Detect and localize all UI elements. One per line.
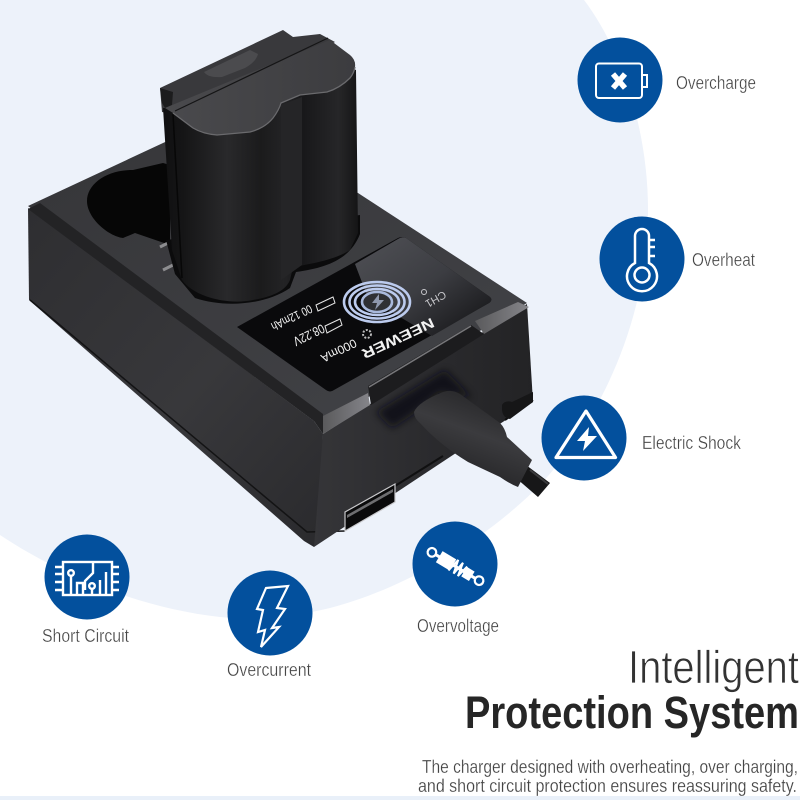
front edge dark slot <box>368 325 484 405</box>
cable wire highlight <box>530 470 548 484</box>
battery top cap <box>165 40 355 135</box>
label: Overheat <box>692 250 755 270</box>
badge <box>600 216 684 302</box>
front edge light corner left <box>323 393 370 434</box>
battery back side <box>160 88 173 108</box>
cable shadow on charger <box>376 370 472 428</box>
battery body <box>163 60 358 302</box>
label: Overcharge <box>676 73 756 93</box>
icon: lightning bolt <box>257 586 288 647</box>
icon: thermometer <box>627 229 657 291</box>
charger base seam <box>30 300 345 532</box>
icon: bolt <box>577 427 597 451</box>
battery back block <box>160 30 335 120</box>
feature: overvoltage <box>412 522 499 636</box>
battery cap rim <box>173 67 355 135</box>
front edge slot highlight <box>369 326 471 387</box>
label: Overcurrent <box>227 660 311 680</box>
bottom pale strip <box>0 796 800 800</box>
cable wire <box>516 465 550 497</box>
badge <box>542 396 626 480</box>
label: Electric Shock <box>642 433 742 453</box>
badge <box>44 534 130 620</box>
background: pale blue curved shape <box>0 0 648 618</box>
battery back latch <box>204 50 258 77</box>
screen icons <box>316 297 342 333</box>
battery side edge <box>173 114 182 278</box>
screen text: capacity: 00 12mAh <box>269 302 315 334</box>
badge <box>578 38 662 122</box>
usb cable <box>414 391 550 497</box>
charger left face <box>28 208 323 547</box>
bolt on screen <box>372 294 384 310</box>
screen brightness icon <box>363 330 371 338</box>
feature: overcurrent <box>227 570 312 680</box>
charging rings <box>344 282 410 322</box>
right face base seam <box>395 400 533 486</box>
screen text: voltage: 08.22V <box>291 321 327 349</box>
brand logo: NEEWER <box>359 315 437 362</box>
front edge light corner right <box>475 302 529 334</box>
well contacts <box>160 242 173 270</box>
occupied well shadow <box>166 215 360 304</box>
charger right face <box>314 304 533 547</box>
icon: spring <box>425 544 486 589</box>
screen text: current: 000mA <box>319 336 359 365</box>
feature: electric shock <box>542 396 742 480</box>
battery groove <box>281 97 302 280</box>
label: Overvoltage <box>417 616 499 636</box>
screen dot <box>422 290 426 294</box>
charger with battery and cable <box>28 30 550 547</box>
screen text: channel: CH1 <box>423 288 448 309</box>
icon: warning triangle <box>556 411 616 458</box>
badge <box>412 522 498 606</box>
badge <box>228 570 312 656</box>
title <box>465 641 799 738</box>
battery cap seam <box>175 38 328 111</box>
charger top face <box>28 112 527 424</box>
feature: overheat <box>600 216 755 302</box>
screen reflection <box>355 237 491 336</box>
usb port <box>345 484 395 531</box>
label: Short Circuit <box>42 626 129 646</box>
description text <box>418 757 798 796</box>
cable boot <box>414 391 532 487</box>
icon: battery with cross <box>596 64 647 98</box>
textured dark edge stripe <box>28 203 323 434</box>
feature: overcharge <box>578 38 756 122</box>
side notch <box>502 392 533 419</box>
icon: circuit board <box>55 562 119 595</box>
feature: short circuit <box>42 534 130 646</box>
screen glass <box>237 237 491 392</box>
empty battery well <box>87 163 170 245</box>
